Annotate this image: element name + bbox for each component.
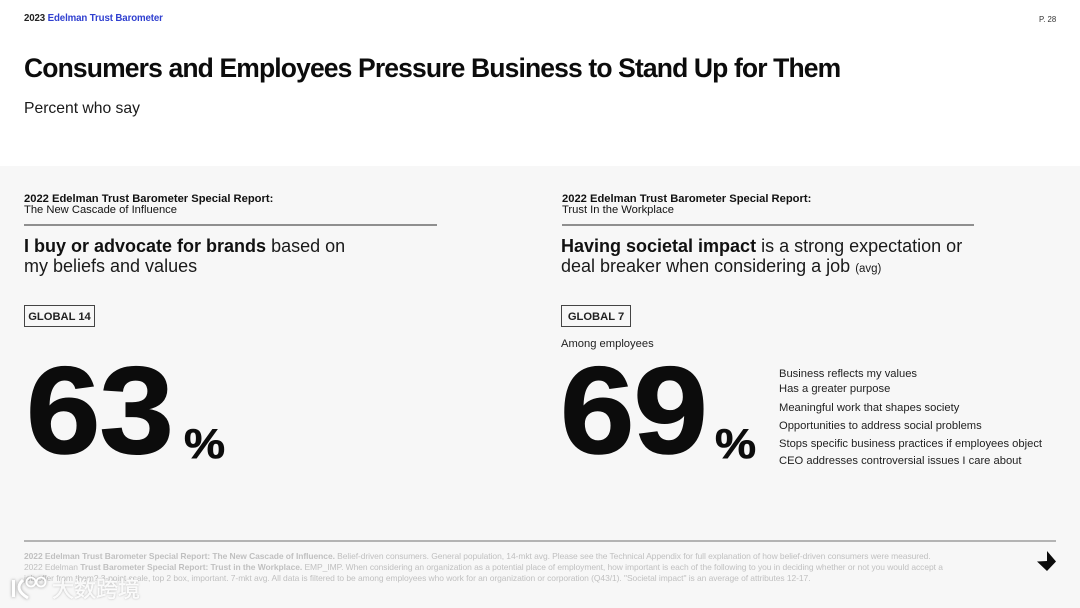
footnote: 2022 Edelman Trust Barometer Special Report: The New Cascade of Influence. Belief-driven consumers. General population, 14-mkt avg. Please see the Technical Appendix for full explanation of how belief-driven consumers were measured. bbox=[24, 551, 931, 561]
attribute 16: Stops specific business practices if employees object bbox=[779, 438, 1042, 450]
attribute 13: Has a greater purpose bbox=[779, 382, 890, 394]
footnote: 2022 Edelman Trust Barometer Special Report: Trust in the Workplace. EMP_IMP. When considering an organization as a potential place of employment, how important is each of the following to you in deciding whether or not you would accept a bbox=[24, 562, 943, 572]
title: Consumers and Employees Pressure Business to Stand Up for Them bbox=[24, 53, 840, 83]
source heading: workplace report: Trust In the Workplace bbox=[562, 204, 674, 216]
statement: societal impact: Having societal impact is a strong expectation or bbox=[561, 236, 962, 256]
statement: societal impact: deal breaker when considering a job (avg) bbox=[561, 256, 881, 276]
stat: 69 percent: % bbox=[714, 420, 756, 466]
header logo: 2023 Edelman Trust Barometer bbox=[24, 13, 163, 24]
source heading: consumers report: The New Cascade of Influence bbox=[24, 204, 177, 216]
audience label: Among employees bbox=[561, 338, 654, 350]
attribute 14: Meaningful work that shapes society bbox=[779, 402, 959, 414]
badge: Global 7 bbox=[561, 305, 631, 327]
source heading: consumers report bbox=[24, 193, 273, 216]
source heading: consumers report: 2022 Edelman Trust Barometer Special Report: bbox=[24, 193, 273, 205]
attribute 12: Business reflects my values bbox=[779, 368, 917, 380]
badge: Global 14: GLOBAL 14 bbox=[28, 311, 91, 323]
footnote: job offer from them? 3-point scale, top 2 box, important. 7-mkt avg. All data is filtered to be among employees who work for an organization or corporation (Q43/1). "Societal impact" is an average of attributes 12-17. bbox=[24, 573, 810, 583]
attribute 17: CEO addresses controversial issues I care about bbox=[779, 454, 1022, 466]
icon: next arrow bbox=[1037, 551, 1056, 571]
stat: 63 percent: % bbox=[184, 420, 225, 466]
stat: 69 percent: 69 bbox=[560, 342, 706, 480]
footnote bbox=[24, 551, 943, 583]
attribute list bbox=[779, 368, 1042, 466]
page number: P. 28 bbox=[1039, 15, 1056, 24]
statement: societal impact bbox=[561, 236, 962, 276]
subtitle: Percent who say bbox=[24, 100, 140, 117]
panel: grey content background bbox=[0, 166, 1080, 608]
badge: Global 14 bbox=[24, 305, 95, 327]
panel: consumers bbox=[24, 193, 345, 480]
watermark text: 大数跨境 bbox=[52, 577, 140, 602]
source heading: workplace report: 2022 Edelman Trust Barometer Special Report: bbox=[562, 193, 811, 205]
source heading: workplace report bbox=[562, 193, 811, 216]
statement: brands: my beliefs and values bbox=[24, 256, 197, 276]
statement: brands: I buy or advocate for brands based on bbox=[24, 236, 345, 256]
watermark logo bbox=[10, 574, 48, 600]
panel: employees bbox=[560, 193, 1042, 480]
watermark bbox=[10, 574, 140, 602]
attribute 15: Opportunities to address social problems bbox=[779, 420, 982, 432]
badge: Global 7: GLOBAL 7 bbox=[568, 311, 624, 323]
stat: 63 percent: 63 bbox=[26, 342, 172, 480]
statement: brands bbox=[24, 236, 345, 276]
